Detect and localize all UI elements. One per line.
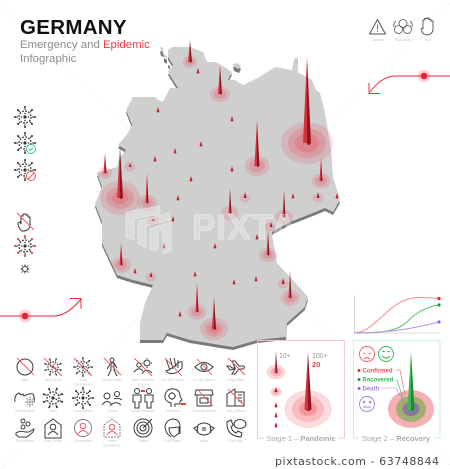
100+ marker <box>284 352 332 428</box>
subtitle: Infographic <box>20 53 77 65</box>
icon: ban: Ban <box>22 378 28 382</box>
icon: do not walk <box>102 358 122 382</box>
icon: virus: Virus <box>49 409 57 413</box>
icon: use mask: Use Mask <box>165 439 181 443</box>
100+ marker: 20 <box>312 360 320 369</box>
neutral face <box>360 396 374 412</box>
icon: animal virus: Animal Virus <box>15 409 35 413</box>
icon: coronavirus <box>72 387 94 413</box>
10+ marker: 10+ <box>279 353 291 360</box>
100+ marker: 100+ <box>312 353 328 360</box>
chart axes <box>354 295 441 333</box>
icon: keep distance: Keep Distance <box>131 409 155 413</box>
panel frame <box>354 340 440 438</box>
icon: flight ban: Flight Ban <box>228 378 244 382</box>
icon: stop coronavirus <box>73 357 93 386</box>
icon: ban crowded places <box>132 358 154 386</box>
row 1 icons <box>17 355 245 386</box>
icon: mask <box>194 423 214 443</box>
title: GERMANY <box>20 16 127 39</box>
icon: caution: Caution <box>371 38 384 42</box>
left icons <box>14 106 36 274</box>
panel frame <box>258 340 344 438</box>
icon: do not touch eye <box>193 359 215 382</box>
icon: stop business: Stop Business <box>193 409 216 413</box>
icon: use mask <box>165 419 181 443</box>
icon: stop offices <box>226 389 246 413</box>
icon: disinfection: Disinfection <box>16 439 34 443</box>
icon: infection: Infection <box>166 409 180 413</box>
icon: group: Group <box>107 409 117 413</box>
icon: stop hand: Stop <box>423 38 431 42</box>
watermark logo: PIXTA <box>192 208 297 247</box>
legend leader lines <box>382 370 405 403</box>
icon: ban <box>17 358 34 382</box>
icon: home quarantine <box>103 419 121 448</box>
icon: stop business <box>193 389 216 413</box>
icon: home quarantine: Quarantine <box>103 444 121 448</box>
legend: Death <box>362 386 380 392</box>
icon: do not touch hand: Do Not Touch <box>162 378 184 382</box>
icon: flight ban <box>227 358 245 382</box>
icon: hand crossed <box>17 213 34 231</box>
icon: infection <box>165 389 186 413</box>
icon: do not walk: Do Not Walk <box>102 378 122 382</box>
legend: Recovered <box>362 378 394 384</box>
line chart <box>354 295 441 333</box>
watermark logo <box>126 206 297 254</box>
icon: stay home: Stay Home <box>44 439 62 443</box>
sad face <box>360 346 374 362</box>
top right icons <box>370 18 433 42</box>
icon: home quarantine: Home <box>107 439 117 443</box>
icon: ban crowded places: Ban Crowded <box>132 378 154 382</box>
icon: small virus <box>20 264 30 274</box>
icon: stop virus: Stop Virus <box>45 378 61 382</box>
icon: disinfection <box>16 419 34 443</box>
arrow: top right trend <box>369 70 450 94</box>
icon: virus <box>39 384 67 413</box>
map of Germany <box>95 40 340 350</box>
icon: keep distance <box>131 388 155 413</box>
row 2 icons <box>15 384 246 413</box>
icon: stop coronavirus: Coronavirus <box>73 382 93 386</box>
icon: quarantine: Quarantine <box>74 439 92 443</box>
icon: biohazard: Biohazard <box>395 38 411 42</box>
panel: stage 1 pandemic <box>258 340 344 443</box>
icon: stop offices: Stop Offices <box>226 409 246 413</box>
happy face <box>378 346 394 362</box>
icon: stop coronavirus: Stop <box>79 378 87 382</box>
curve: confirmed <box>354 297 439 333</box>
icon: virus red <box>14 235 36 257</box>
subtitle <box>20 39 150 65</box>
row 3 icons <box>16 419 246 448</box>
icon: target <box>134 419 152 443</box>
small markers <box>270 387 282 428</box>
icon: virus <box>14 106 36 128</box>
outbreak rings <box>98 56 333 340</box>
stage 1 label: Stage 1 – Pandemic <box>266 434 336 443</box>
curve: recovered <box>354 305 439 333</box>
icon: virus blocked <box>14 159 36 181</box>
icon: stop virus <box>41 355 65 382</box>
icon: stay home <box>44 419 62 443</box>
icon: get help: Get Help <box>229 439 243 443</box>
map extrusion <box>95 50 340 350</box>
icon: coronavirus: Coronavirus <box>73 409 93 413</box>
icon: get help <box>227 420 246 443</box>
tall outbreak spikes <box>104 40 322 330</box>
icon: animal virus <box>15 393 35 413</box>
icon: ban crowded places: Places <box>138 382 149 386</box>
legend: Confirmed <box>362 368 393 374</box>
curve: death <box>354 322 439 333</box>
icon: virus check <box>14 132 36 154</box>
stage 2 label: Stage 2 – Recovery <box>362 434 431 443</box>
stock caption: pixtastock.com - 63748844 <box>275 455 439 468</box>
small outbreak markers <box>134 68 338 316</box>
icon: do not touch eye: Do Not Touch <box>193 378 215 382</box>
panel: stage 2 recovery <box>354 340 440 443</box>
icon: mask: Mask <box>200 439 208 443</box>
icon: group <box>102 392 122 413</box>
recovery marker <box>388 352 434 428</box>
arrow: bottom left trend <box>0 298 81 322</box>
icon: quarantine <box>74 420 92 443</box>
map surface <box>95 47 340 347</box>
icon: do not touch hand <box>162 358 184 382</box>
icon: target: Target <box>138 439 148 443</box>
icon grid <box>15 355 246 448</box>
legend <box>358 368 394 392</box>
subtitle: Emergency and Epidemic <box>20 39 150 51</box>
